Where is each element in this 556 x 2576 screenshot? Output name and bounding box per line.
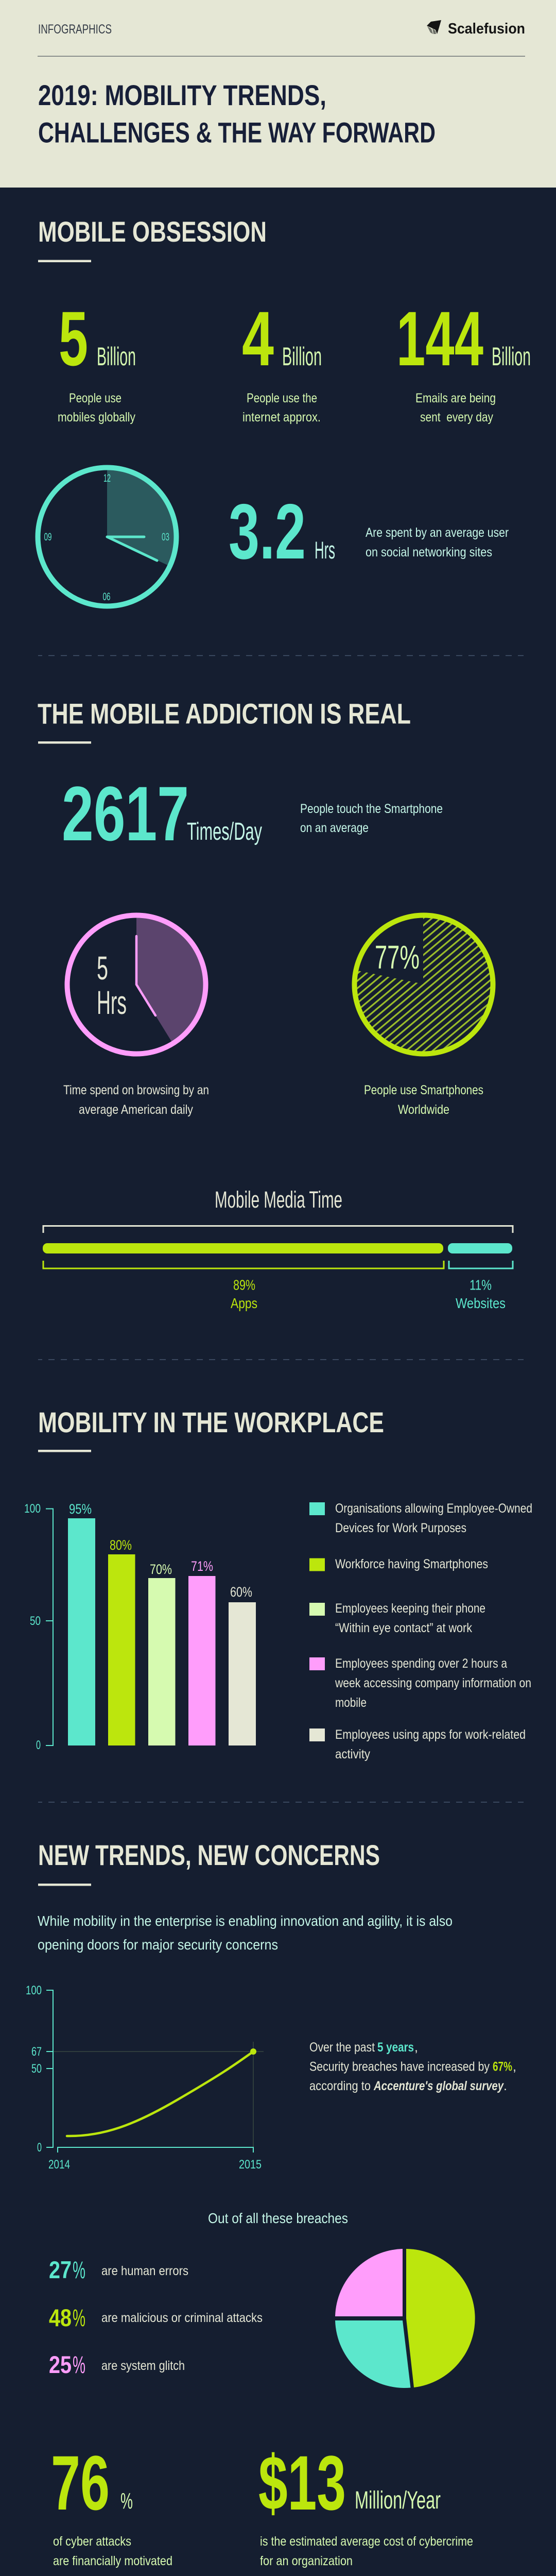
heading: new trends: NEW TRENDS, NEW CONCERNS [38, 1839, 380, 1871]
bar 60 percent: 60% [230, 1584, 252, 1600]
25 percent system glitch [49, 2351, 185, 2378]
bar 71 percent [188, 1558, 215, 1745]
breach growth text: , [414, 2040, 418, 2055]
stat: 76 percent: are financially motivated [53, 2554, 172, 2568]
bar chart: workplace mobility: 100 [24, 1502, 41, 1516]
bar: mobile media time: 89% [233, 1277, 255, 1293]
stat: 2617 times per day [62, 770, 443, 857]
clock chart: 3.2 hours [38, 467, 177, 606]
stat: 13 million per year [258, 2439, 473, 2568]
breach growth text: 5 years [377, 2040, 414, 2055]
heading: new trends [38, 1839, 380, 1886]
legend item 2: Workforce having Smartphones [335, 1557, 488, 1571]
stat: 144 billion [396, 295, 531, 425]
stat: 3.2 hrs: Are spent by an average user [366, 526, 509, 540]
legend item 3: “Within eye contact” at work [335, 1621, 472, 1635]
stat: 144 billion: Emails are being [415, 391, 496, 405]
hatched pie chart: 77 percent: People use Smartphones [364, 1083, 483, 1097]
breach growth text: Accenture's global survey [373, 2079, 504, 2093]
clock chart: 5 hrs browsing: average American daily [79, 1103, 193, 1117]
hatched pie chart: 77 percent: 77% [375, 939, 420, 976]
legend item 5: Employees using apps for work-related [335, 1727, 526, 1742]
bar chart: workplace mobility [24, 1501, 256, 1752]
bar 80 percent: 80% [110, 1537, 132, 1553]
breach growth text: Security breaches have increased by [309, 2060, 490, 2074]
main title [38, 79, 436, 148]
pie chart: breach causes [335, 2249, 475, 2388]
chart legend [309, 1501, 532, 1761]
legend item 1 [309, 1501, 532, 1535]
clock chart: 5 hrs browsing: Time spend on browsing by an [63, 1083, 209, 1097]
intro text: While mobility in the enterprise is enabling innovation and agility, it is also [38, 1913, 453, 1929]
stat: 76 percent: 76 [51, 2439, 110, 2526]
stat: 4 billion: Billion [282, 342, 322, 371]
stat: 13 million per year: Million/Year [355, 2487, 441, 2514]
bar 95 percent: 95% [69, 1501, 92, 1517]
stat: 5 billion: 5 [59, 295, 88, 382]
hatched pie chart: 77 percent [354, 915, 493, 1117]
breach growth text: . [503, 2079, 507, 2093]
header panel [0, 0, 556, 188]
bar: mobile media time: Apps [231, 1295, 257, 1311]
25 percent system glitch: are system glitch [101, 2359, 185, 2373]
48 percent malicious attacks: % [73, 2304, 85, 2331]
heading: mobile obsession [38, 215, 267, 262]
bar 95 percent [68, 1501, 95, 1745]
clock chart: 3.2 hours: 12 [103, 472, 111, 484]
breaches subheading: Out of all these breaches [208, 2210, 348, 2226]
stat: 3.2 hrs: on social networking sites [366, 545, 492, 560]
stat: 4 billion: People use the [247, 391, 317, 405]
stat: 5 billion [58, 295, 136, 425]
intro text [38, 1913, 453, 1953]
intro text: opening doors for major security concerns [38, 1937, 278, 1953]
legend item 5 [309, 1727, 526, 1761]
line chart: breaches 2014 to 2015: 2015 [239, 2158, 262, 2172]
stat: 76 percent [51, 2439, 172, 2568]
stat: 3.2 hrs [229, 488, 509, 575]
heading: mobile obsession: MOBILE OBSESSION [38, 215, 267, 248]
bar: mobile media time: Mobile Media Time [215, 1187, 342, 1213]
stat: 76 percent: % [120, 2488, 133, 2514]
main title: CHALLENGES & THE WAY FORWARD [38, 116, 436, 148]
stat: 4 billion [242, 295, 322, 425]
bar 60 percent [229, 1584, 256, 1745]
bar: mobile media time: Websites [456, 1295, 506, 1311]
48 percent malicious attacks: are malicious or criminal attacks [101, 2311, 263, 2325]
bar chart: workplace mobility: 50 [30, 1614, 41, 1628]
header label: INFOGRAPHICS [38, 22, 112, 37]
line chart: breaches 2014 to 2015: 100 [26, 1984, 42, 1997]
stat: 144 billion: 144 [396, 295, 483, 382]
48 percent malicious attacks [49, 2304, 263, 2331]
line chart: breaches 2014 to 2015: 50 [31, 2062, 42, 2076]
heading: workplace [38, 1406, 384, 1452]
breach growth text: according to [309, 2079, 371, 2093]
stat: 13 million per year: is the estimated average cost of cybercrime [260, 2534, 473, 2549]
bar: mobile media time [43, 1187, 513, 1311]
stat: 2617 times per day: Times/Day [187, 818, 262, 845]
stat: 13 million per year: for an organization [260, 2554, 353, 2568]
legend item 3: Employees keeping their phone [335, 1601, 485, 1616]
25 percent system glitch: % [73, 2351, 85, 2378]
line chart: breaches 2014 to 2015: 0 [37, 2141, 42, 2155]
legend item 4: mobile [335, 1696, 367, 1710]
clock chart: 3.2 hours: 09 [44, 531, 51, 543]
bar 70 percent: 70% [150, 1562, 172, 1577]
legend item 1: Devices for Work Purposes [335, 1521, 466, 1535]
clock chart: 5 hrs browsing [63, 915, 209, 1117]
stat: 2617 times per day: People touch the Smartphone [300, 802, 443, 816]
bar: mobile media time: 11% [470, 1277, 492, 1293]
stat: 144 billion: sent every day [420, 410, 493, 425]
clock chart: 3.2 hours: 03 [162, 531, 169, 543]
stat: 5 billion: Billion [97, 342, 136, 371]
stat: 4 billion: internet approx. [242, 410, 321, 425]
stat: 2617 times per day: 2617 [62, 770, 189, 857]
stat: 76 percent: of cyber attacks [53, 2534, 131, 2549]
stat: 5 billion: People use [69, 391, 121, 405]
heading: addiction [38, 698, 411, 744]
breach growth text: , [513, 2060, 516, 2074]
legend item 4: Employees spending over 2 hours a [335, 1656, 507, 1671]
breach growth text: 67% [493, 2060, 512, 2074]
legend item 4 [309, 1656, 531, 1710]
stat: 5 billion: mobiles globally [58, 410, 135, 425]
line chart: breaches 2014 to 2015 [26, 1984, 264, 2172]
25 percent system glitch: 25 [49, 2351, 72, 2378]
27 percent human errors: are human errors [101, 2264, 188, 2278]
stat: 3.2 hrs: Hrs [315, 536, 335, 564]
legend item 3 [309, 1601, 485, 1635]
line chart: breaches 2014 to 2015: 2014 [48, 2158, 70, 2172]
stat: 4 billion: 4 [242, 295, 274, 382]
breach growth text: Over the past [309, 2040, 375, 2055]
27 percent human errors: 27 [49, 2256, 72, 2283]
bar 80 percent [108, 1537, 135, 1745]
bar 71 percent: 71% [191, 1558, 213, 1574]
clock chart: 5 hrs browsing: 5 [97, 950, 108, 987]
27 percent human errors: % [73, 2256, 85, 2283]
legend item 5: activity [335, 1747, 370, 1761]
line chart: breaches 2014 to 2015: 67 [31, 2045, 42, 2059]
clock chart: 3.2 hours: 06 [103, 591, 110, 603]
main title: 2019: MOBILITY TRENDS, [38, 79, 326, 111]
breach breakdown list [49, 2256, 263, 2378]
heading: addiction: THE MOBILE ADDICTION IS REAL [38, 698, 411, 730]
clock chart: 5 hrs browsing: Hrs [97, 984, 127, 1021]
bar chart: workplace mobility: 0 [36, 1738, 41, 1752]
48 percent malicious attacks: 48 [49, 2304, 72, 2331]
stat: 3.2 hrs: 3.2 [229, 488, 306, 575]
hatched pie chart: 77 percent: Worldwide [398, 1103, 449, 1117]
breach growth text [309, 2040, 516, 2093]
bar 70 percent [148, 1562, 175, 1745]
heading: workplace: MOBILITY IN THE WORKPLACE [38, 1406, 384, 1438]
stat: 2617 times per day: on an average [300, 821, 369, 835]
stat: 13 million per year: $13 [258, 2439, 346, 2526]
27 percent human errors [49, 2256, 188, 2283]
brand logo: Scalefusion [448, 21, 525, 37]
